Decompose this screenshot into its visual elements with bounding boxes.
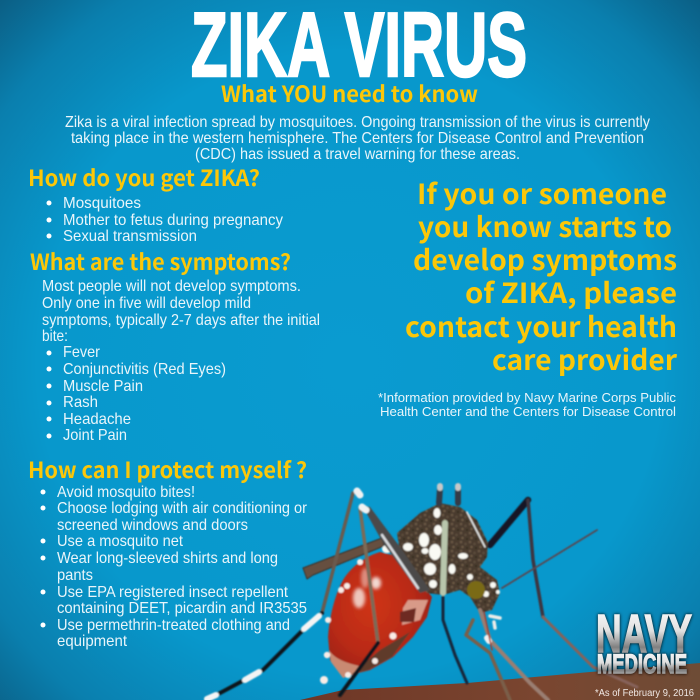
list: transmission routes: Sexual transmission [63,228,197,245]
list: protection tips: screened windows and doors [57,517,248,534]
callout: contact your health care provider: contact your health [405,306,677,346]
list: protection tips: Use a mosquito net [57,533,183,550]
abdomen pale tail [329,650,372,678]
symptoms paragraph [42,278,320,345]
mid leg lower [340,643,378,695]
wide femur [362,505,430,593]
heading: how do you get Zika: How do you get ZIKA? [28,161,260,193]
source note [378,390,676,419]
callout: contact your health care provider: you know starts to [418,206,672,246]
proboscis [484,612,492,650]
list: protection tips: Avoid mosquito bites! [57,484,195,501]
list: symptoms: Fever [63,344,101,361]
list: symptoms: Headache [63,411,131,428]
intro text: Zika is a viral infection spread by mosquitoes. Ongoing transmission of the virus is currently [65,114,650,131]
abdomen lower brown bands [352,632,410,674]
heading: symptoms: What are the symptoms? [30,245,291,277]
list: protection tips: equipment [57,633,128,650]
source note: *Information provided by Navy Marine Corps Public [378,390,676,405]
icon: mosquito photo illustration [207,486,637,700]
intro text [65,114,650,163]
far mid leg [443,597,467,683]
thorax scales [382,508,500,597]
antenna [502,530,597,588]
left hind leg lower [207,613,322,700]
eye [467,581,485,599]
callout: contact your health care provider: of ZIKA, please [465,272,677,312]
list: protection tips: pants [57,567,93,584]
list: protection tips: Use EPA registered insect repellent [57,584,289,601]
symptoms paragraph: bite: [42,328,68,345]
thorax and head [397,503,500,613]
abdomen dark patch [400,608,416,622]
thorax pale stripes [443,523,445,593]
list: symptoms: Joint Pain [63,427,127,444]
right hind leg upper [490,500,528,545]
intro text: (CDC) has issued a travel warning for these areas. [195,146,520,163]
left hind leg upper [322,493,353,613]
list: symptoms [46,344,226,444]
list: transmission routes: Mosquitoes [63,195,141,212]
callout: contact your health care provider: care provider [492,339,678,379]
right hind leg lower [528,500,543,617]
subtitle: What YOU need to know [221,77,478,109]
symptoms paragraph: Only one in five will develop mild [42,295,251,312]
front leg A [480,610,548,700]
callout: contact your health care provider: develop symptoms [413,239,677,279]
abdomen pale patch [402,600,428,625]
palps [490,616,500,628]
front leg B [466,620,510,700]
mid leg upper [360,508,378,643]
heading: protection: How can I protect myself ? [28,453,307,485]
thorax side line [467,512,485,547]
date note: *As of February 9, 2016 [595,688,694,699]
list: symptoms: Conjunctivitis (Red Eyes) [63,361,226,378]
antenna knobs [439,488,458,503]
list: protection tips: Use permethrin-treated clothing and [57,617,290,634]
joint caps [357,491,366,510]
abdomen highlights [320,559,396,684]
leg bands [207,616,319,699]
list: protection tips: containing DEET, picardin and IR3535 [57,600,307,617]
callout: contact your health care provider [405,173,678,379]
skin surface [300,663,700,700]
list: symptoms: Muscle Pain [63,378,143,395]
intro text: taking place in the western hemisphere. The Centers for Disease Control and Prevention [71,130,644,147]
right hind foot [543,617,637,687]
callout: contact your health care provider: If you or someone [417,173,667,213]
femur pale edge [382,535,418,588]
symptoms paragraph: symptoms, typically 2-7 days after the initial [42,312,320,329]
list: protection tips: Choose lodging with air conditioning or [57,500,308,517]
front leg A joint [487,638,489,641]
wing [303,538,384,579]
source note: Health Center and the Centers for Disease Control [380,404,676,419]
symptoms paragraph: Most people will not develop symptoms. [42,278,301,295]
abdomen [328,552,432,677]
knob tips [440,486,458,488]
list: symptoms: Rash [63,394,98,411]
list: transmission routes: Mother to fetus during pregnancy [63,212,283,229]
list: transmission routes [46,195,283,245]
list: protection tips: Wear long-sleeved shirts and long [57,550,278,567]
list: protection tips [40,484,308,650]
